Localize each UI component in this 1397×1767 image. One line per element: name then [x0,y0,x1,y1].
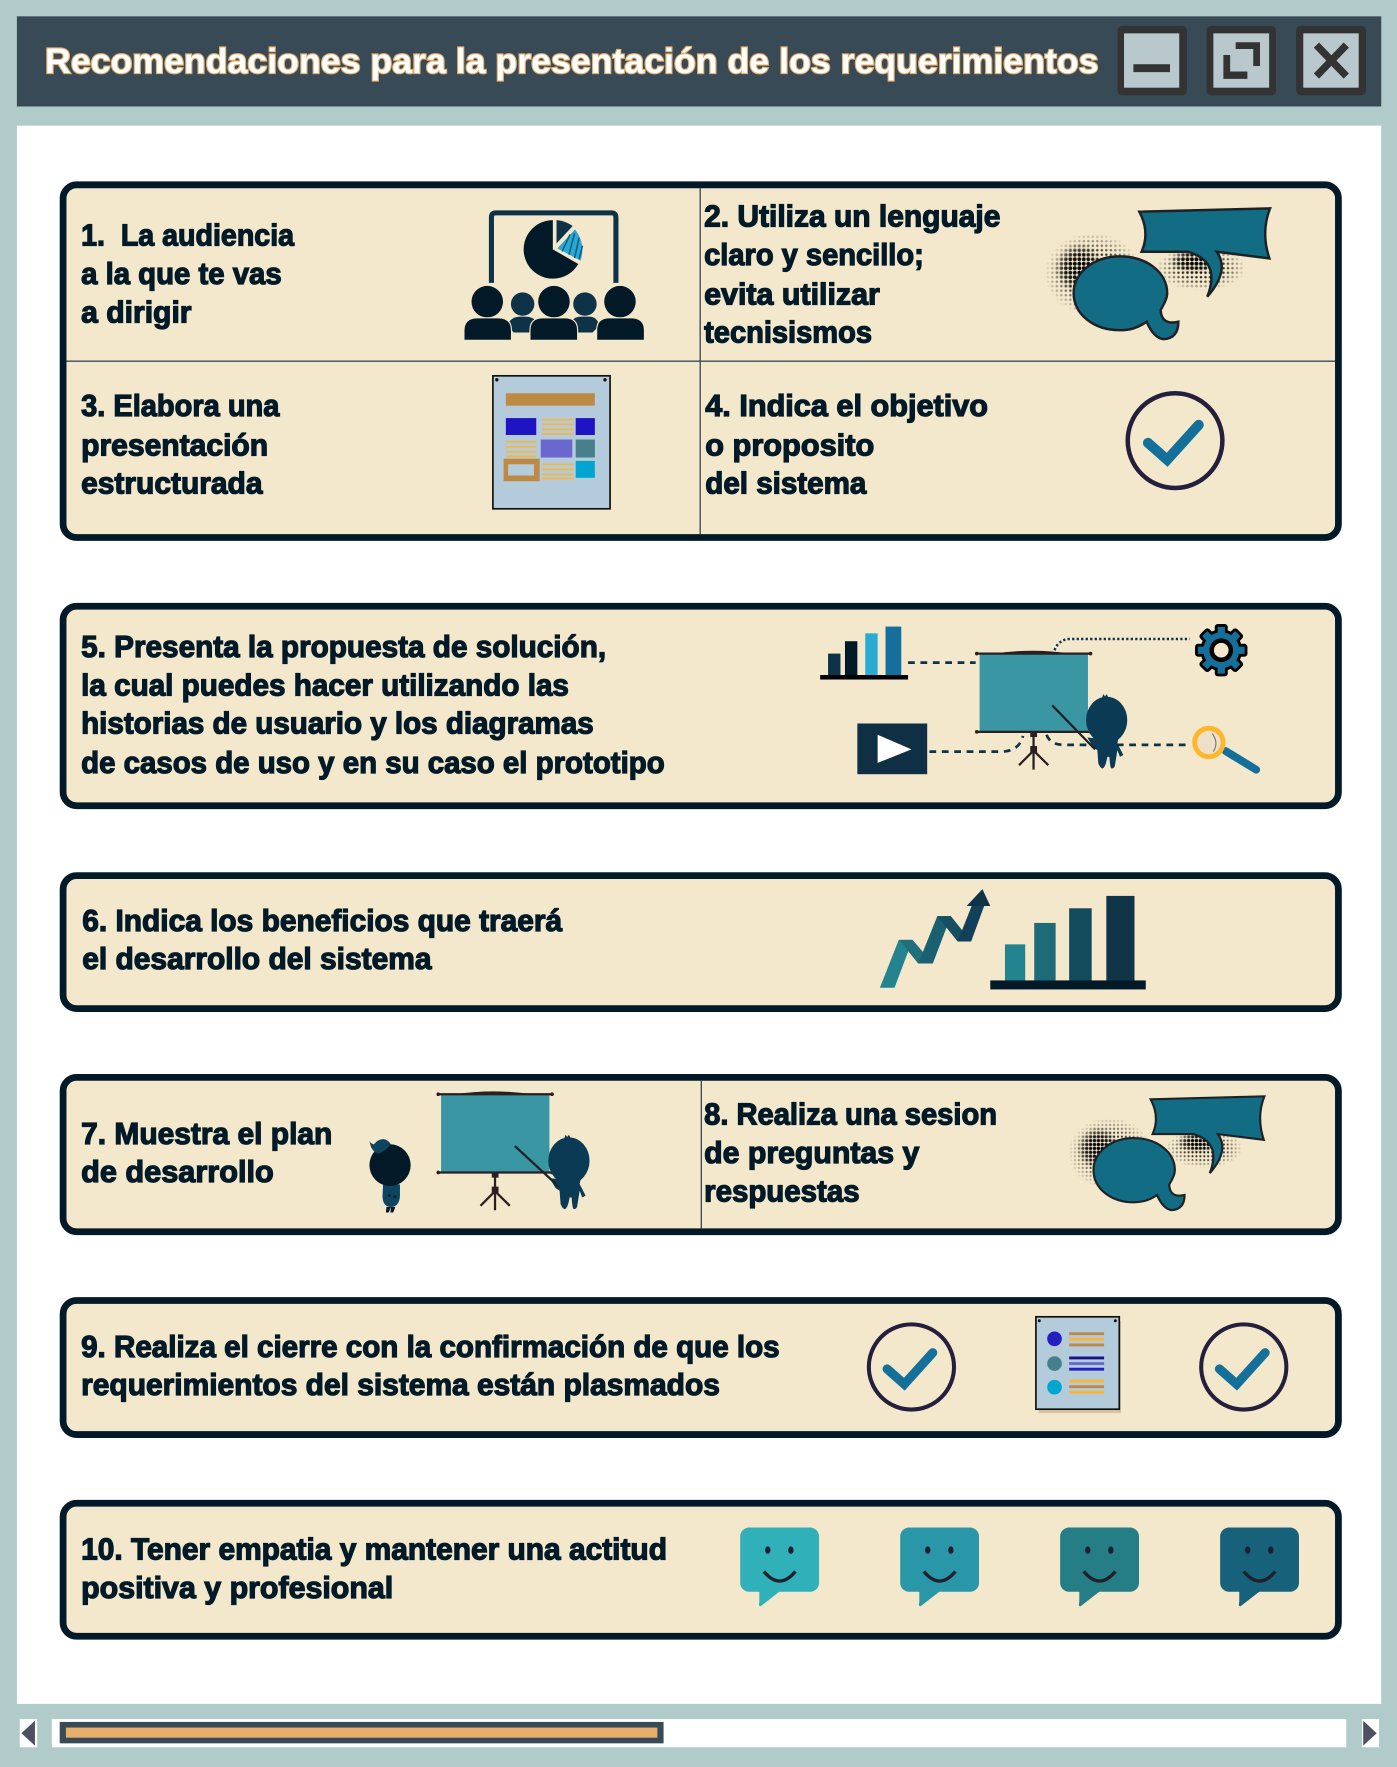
item 9 text line 2: requerimientos del sistema están plasmados [81,1368,720,1402]
item 9 text: 9. Realiza el cierre con la confirmación de que los [81,1330,780,1364]
item 10 text: 10. Tener empatia y mantener una actitud [81,1533,667,1567]
panel: item 10 [63,1503,1338,1636]
icon: smiley bubble 2 [900,1528,979,1606]
scrollbar [20,1719,1379,1747]
item 2 text line 2: claro y sencillo; [704,238,924,272]
icon: magnifying glass [1195,728,1256,770]
item 3 text line 3: estructurada [81,467,264,501]
item 8 text line 3: respuestas [704,1174,860,1208]
icon: audience member [369,1139,411,1213]
item 7 text: 7. Muestra el plan [81,1117,332,1151]
scroll left button [20,1719,37,1747]
item 1 text line 2: a la que te vas [81,257,282,291]
panel: items 1 to 4 [63,185,1338,538]
icon: check mark [1128,393,1222,488]
item 2 text line 3: evita utilizar [704,277,880,311]
scroll right button [1362,1719,1379,1747]
item 6 text line 2: el desarrollo del sistema [82,942,433,976]
item 2 text: 2. Utiliza un lenguaje [704,200,1000,234]
item 4 text line 3: del sistema [705,467,867,501]
icon: projection screen with presenter [436,1091,590,1210]
item 1 text line 3: a dirigir [81,295,192,329]
item 5 text line 4: de casos de uso y en su caso el prototipo [81,746,665,780]
button: close [1296,26,1366,95]
item 5 text line 2: la cual puedes hacer utilizando las [81,668,569,702]
item 4 text: 4. Indica el objetivo [705,389,988,423]
connector lines [908,639,1191,752]
button: minimize [1118,26,1187,95]
icon: gear [1196,625,1246,675]
item 5 text line 3: historias de usuario y los diagramas [81,707,594,741]
icon: rising arrow [880,889,990,988]
icon: audience and pie chart [464,213,644,340]
panel: item 9 [63,1300,1338,1435]
icon: projection screen with presenter [975,651,1127,770]
item 6 text: 6. Indica los beneficios que traerá [82,904,562,938]
item 3 text line 2: presentación [81,428,268,462]
item 8 text: 8. Realiza una sesion [704,1098,997,1132]
item 7 text line 2: de desarrollo [81,1155,274,1189]
panel: item 6 [63,876,1338,1009]
item 5 text: 5. Presenta la propuesta de solución, [81,630,606,664]
button: maximize [1207,26,1276,95]
icon: smiley bubble 3 [1060,1528,1139,1606]
icon: bar chart [820,627,908,680]
icon: video player [857,723,927,774]
panel: items 7 and 8 [63,1077,1338,1232]
icon: list document [1036,1317,1121,1413]
icon: check mark right [1201,1324,1286,1410]
icon: smiley bubble 1 [740,1528,819,1606]
item 10 text line 2: positiva y profesional [81,1571,393,1605]
icon: check mark left [869,1324,954,1410]
title: Recomendaciones para la presentación de los requerimientos [45,42,1098,81]
item 1 text: 1. La audiencia [81,219,295,253]
title bar [17,16,1381,106]
icon: speech bubbles [1068,1096,1264,1210]
item 4 text line 2: o proposito [705,428,874,462]
panel: item 5 [63,606,1338,806]
icon: smiley bubble 4 [1220,1528,1299,1606]
icon: structured document [493,376,610,509]
item 8 text line 2: de preguntas y [704,1136,919,1170]
icon: growing bars [990,896,1146,989]
icon: speech bubbles [1044,208,1270,339]
item 2 text line 4: tecnisismos [704,316,872,350]
item 3 text: 3. Elabora una [81,389,280,423]
